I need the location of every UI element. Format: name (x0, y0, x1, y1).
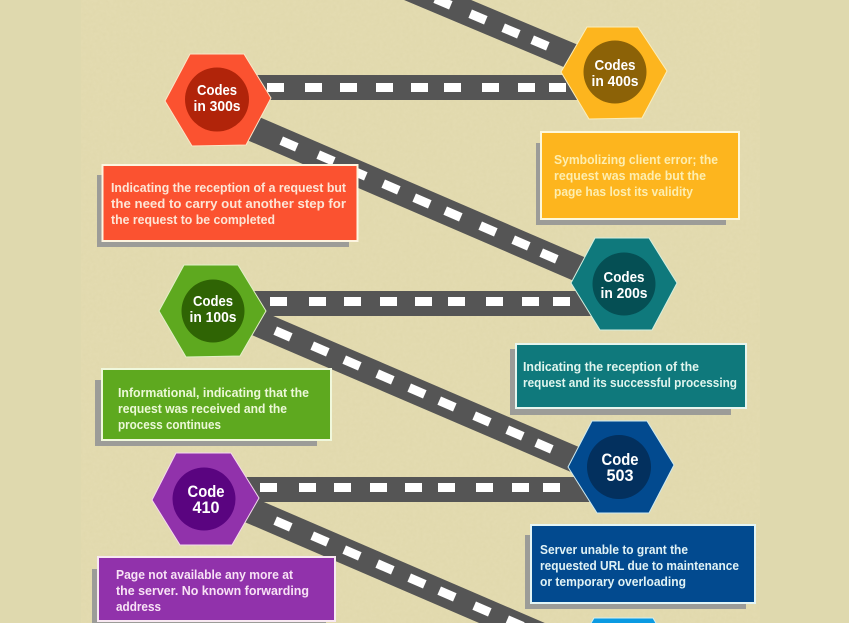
callout: 400s description: request was made but the (554, 168, 706, 183)
callout: 410 description: address (116, 599, 161, 614)
hexagon: Code 410 (152, 453, 259, 545)
callout: 503 description (525, 525, 755, 609)
callout: 410 description (92, 557, 335, 623)
hexagon: Codes in 300s: in 300s (194, 98, 240, 115)
callout: 410 description: Page not available any more at (116, 567, 294, 582)
callout: 100s description: Informational, indicating that the (118, 385, 309, 400)
callout: 400s description: page has lost its validity (554, 184, 694, 199)
callout: 410 description: the server. No known forwarding (116, 583, 309, 598)
callout: 300s description: the request to be completed (111, 212, 275, 227)
hexagon: Code 503: 503 (606, 466, 634, 485)
callout: 200s description: Indicating the reception of the (523, 359, 699, 374)
road: horizontal 410 to 503 (240, 477, 600, 502)
road: diagonal 300s to 200s (245, 125, 600, 278)
road: horizontal 100s to 200s (250, 291, 600, 316)
road: top diagonal into 400s (390, 0, 590, 64)
callout: 100s description: request was received and the (118, 401, 287, 416)
hexagon: Codes in 200s: in 200s (600, 285, 648, 302)
callout: 503 description: or temporary overloading (540, 574, 686, 589)
hexagon: Codes in 400s (561, 27, 667, 119)
callout: 100s description (95, 369, 331, 446)
hexagon: Code 410: Code (188, 482, 224, 501)
hexagon: Codes in 200s (571, 238, 677, 330)
hexagon: Codes in 400s: in 400s (592, 73, 638, 90)
callout: 200s description (510, 344, 746, 415)
callout: 300s description: the need to carry out another step for (111, 196, 346, 211)
road: diagonal 100s to 503 (245, 318, 590, 466)
hexagon: Codes in 100s: in 100s (190, 309, 236, 326)
hexagon: Codes in 200s: Codes (604, 269, 644, 286)
callout: 503 description: requested URL due to maintenance (540, 558, 739, 573)
road: diagonal 410 to bottom (238, 505, 570, 623)
callout: 200s description: request and its successful processing (523, 375, 737, 390)
road: horizontal 300s to 400s (250, 75, 590, 100)
hexagon: cropped light blue at bottom (587, 618, 660, 623)
hexagon: Codes in 300s (165, 54, 271, 146)
hexagon: Code 503 (568, 421, 674, 513)
hexagon: Code 410: 410 (192, 498, 220, 517)
callout: 400s description (536, 132, 739, 225)
callout: 100s description: process continues (118, 417, 221, 432)
hexagon: Codes in 100s (159, 265, 266, 357)
hexagon: Codes in 100s: Codes (193, 293, 233, 310)
callout: 503 description: Server unable to grant the (540, 542, 688, 557)
hexagon: Codes in 300s: Codes (197, 82, 237, 99)
hexagon: Code 503: Code (602, 450, 638, 469)
callout: 300s description: Indicating the reception of a request but (111, 180, 347, 195)
callout: 300s description (97, 165, 358, 247)
callout: 400s description: Symbolizing client error; the (554, 152, 718, 167)
hexagon: Codes in 400s: Codes (594, 57, 636, 74)
